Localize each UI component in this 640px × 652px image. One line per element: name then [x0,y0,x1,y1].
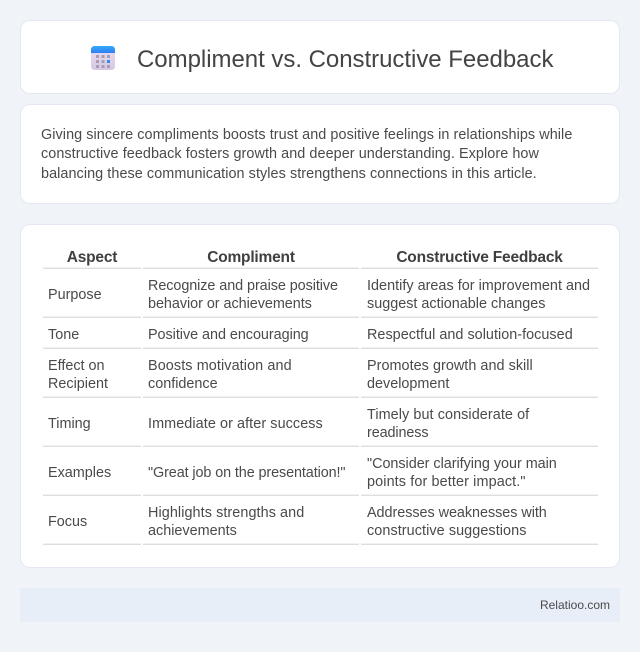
row: tone [43,327,598,349]
intro text: balancing these communication styles strengthens connections in this article. [41,166,537,182]
text: Respectful and solution-focused [367,327,573,343]
text: Identify areas for improvement and [367,278,590,294]
icon: calendar [91,46,115,70]
text: "Consider clarifying your main [367,456,557,472]
panel: title header [20,20,620,94]
intro text [41,126,572,182]
text: behavior or achievements [148,296,312,312]
text: Focus [48,514,87,530]
intro text: Giving sincere compliments boosts trust and positive feelings in relationships while [41,126,572,142]
text: Tone [48,327,79,343]
text: Examples [48,465,111,481]
text: Purpose [48,287,102,303]
text: Effect on [48,358,105,374]
text: Recipient [48,376,108,392]
text: Aspect [67,249,117,266]
text: Constructive Feedback [396,249,563,266]
text: Recognize and praise positive [148,278,338,294]
text: development [367,376,449,392]
footer brand text: Relatioo.com [540,598,610,612]
title: Compliment vs. Constructive Feedback [137,46,553,73]
text: Addresses weaknesses with [367,505,547,521]
footer bar [20,588,620,622]
text: Timely but considerate of [367,407,529,423]
row: effect on recipient [43,358,598,398]
text: Compliment [207,249,295,266]
row: timing [43,407,598,447]
text: Timing [48,416,91,432]
intro text: constructive feedback fosters growth and deeper understanding. Explore how [41,146,539,162]
text: Boosts motivation and [148,358,292,374]
text: "Great job on the presentation!" [148,465,345,481]
table header [43,249,598,269]
text: Positive and encouraging [148,327,309,343]
text: readiness [367,425,428,441]
panel: introduction [20,104,620,204]
text: Highlights strengths and [148,505,304,521]
row: focus [43,505,598,545]
text: confidence [148,376,218,392]
text: Promotes growth and skill [367,358,533,374]
row: purpose [43,278,598,318]
panel: comparison table [20,224,620,568]
text: achievements [148,523,237,539]
text: points for better impact." [367,474,526,490]
text: Immediate or after success [148,416,323,432]
row: examples [43,456,598,496]
text: constructive suggestions [367,523,526,539]
text: suggest actionable changes [367,296,545,312]
